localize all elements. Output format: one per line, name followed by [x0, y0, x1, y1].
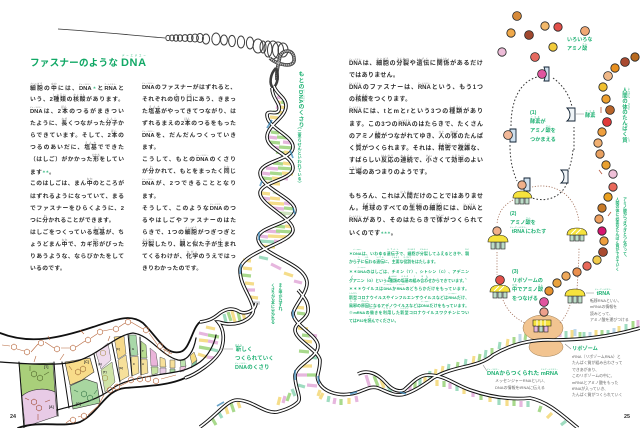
footnotes — [349, 248, 469, 323]
footnotes: ※mRNAの働はたら きを利用りよう した新型しんがた コロナウイルスワクチンについ — [349, 308, 469, 315]
label: chain growth note: 人間の体に必要なたんぱく質ができていく — [616, 197, 620, 271]
text right page paragraph 2: RNAアールエヌエー があり、そのはたらきで体からだ がつくられて — [349, 215, 483, 224]
band outline strokes — [0, 318, 216, 428]
base letters: [C] — [84, 360, 89, 364]
text: tRNA explanation: アミノ酸を運びつける — [590, 317, 629, 322]
label: step 2: (2) — [510, 211, 516, 217]
text: ribosome explanation: たんぱく質が組み合わさって — [572, 360, 622, 365]
enzymes — [510, 67, 575, 191]
label: ribosome: リボゾーム — [572, 346, 598, 352]
label: various amino acids: いろいろな — [567, 37, 593, 43]
text: tRNA explanation: mRNAの情報を — [590, 304, 617, 309]
text column 1: ょうどまん中なか で、カギ形がた がぴった — [30, 239, 124, 248]
text right page paragraph 1: すばらしい反応はんのう の連続れんぞく で、小ちい さくて効率こうりつ のよい — [349, 155, 483, 164]
label: step 3: 中なか でアミノ酸さん — [512, 284, 543, 293]
dashed path of enzyme — [510, 77, 574, 200]
DNA double helix rungs — [259, 97, 295, 247]
label: newly made DNA chain: 新あたら しく — [235, 344, 253, 353]
molecule chain upper band — [2, 319, 172, 362]
small base panels — [96, 335, 197, 392]
label: various amino acids — [567, 36, 593, 52]
text: ribosome explanation: tRNAが入っていき、 — [572, 386, 608, 391]
footnotes: てはP32を読よ んでください。 — [349, 316, 398, 323]
label: enzyme: 酵素こうそ — [585, 110, 595, 119]
label: chain splits: くさりが2本に分かれる — [271, 283, 276, 324]
base letters: (A) — [98, 362, 102, 366]
lower helix rungs — [212, 375, 566, 425]
label: step 1 — [530, 110, 556, 143]
text column 1: つに分わ かれることができます。 — [30, 215, 115, 224]
text column 2: それぞれの切き り口ぐち にあう、きまっ — [142, 94, 236, 103]
text: mRNA explanation: DNAの情報をtRNAに伝える — [495, 385, 545, 390]
text: tRNA explanation — [590, 298, 629, 322]
label: chain growth note: アミノ酸がつぎつぎとつながって、 — [623, 197, 628, 259]
text column 2: ます。 — [142, 194, 160, 200]
label: newly made DNA chain — [235, 344, 274, 371]
base letters: [G] — [119, 366, 123, 370]
label: mRNA made from DNA: DNAディーエヌエー からつくられた mRNAエムアールエヌエー — [487, 369, 558, 377]
text column 1: （はしご）がかかった形かたち をしてい — [30, 154, 124, 163]
base letters — [44, 347, 144, 409]
text column 2: そうして、このようなDNAディーエヌエー のつ — [142, 204, 236, 212]
molecule structures in T A C G panels — [30, 366, 49, 381]
label: human body protein: 人間にんげん の 体からだ のたんぱく 質しつ — [621, 87, 630, 142]
label: chain growth note — [616, 197, 628, 271]
text: mRNA explanation: メッセンジャーRNAといい、 — [495, 378, 547, 383]
footnotes: ＊DNAディーエヌエー は、いわゆる遺伝子いでんし で、細胞さいぼう が分裂ぶんれつ してふえるときや、親おや — [349, 249, 469, 256]
text column 2 — [142, 82, 236, 272]
text column 1: このはしごは、まん中なか のところが — [30, 178, 124, 187]
tRNA units — [488, 191, 587, 332]
text column 1 — [30, 82, 124, 272]
label: step 2: アミノ酸さん を — [510, 217, 536, 226]
text column 1: ます＊＊。 — [30, 170, 55, 177]
text: tRNA explanation: 転移RNAといい、 — [590, 298, 622, 303]
base letters: [C] — [116, 347, 120, 351]
label: step 1: アミノ酸さん を — [530, 125, 556, 134]
text: tRNA explanation: 読みとって、 — [590, 311, 613, 316]
text right page paragraph 1: く質しつ がつくられます。それは、精密せいみつ で複雑ふくざつ な、 — [349, 143, 483, 152]
text column 2: ます。 — [142, 145, 160, 151]
footnotes: ＊＊DNAディーエヌエー のはしごは、チミン（T）、シトシン（C）、アデニン（A）、 — [349, 268, 469, 280]
DNA helix strands — [185, 86, 640, 428]
footnotes: ＊＊＊ウイルスはDNAディーエヌエー かRNAアールエヌエー のどちらかだけをもっています。 — [349, 285, 469, 291]
text: ribosome explanation: このリボゾームの中に、 — [572, 373, 615, 378]
text column 2: DNAディーエヌエー のファスナーがはずれると、 — [142, 83, 236, 91]
coil of chromosome thread — [58, 29, 294, 88]
label: step 3: をつなげる — [512, 296, 538, 302]
label: various amino acids: アミノ酸さん — [567, 43, 587, 52]
footnotes: 風邪かぜ の原因げんいん になるアデノウイルスなどはDNAディーエヌエー だけをもっています。 — [349, 301, 469, 308]
base letters: [G] — [76, 402, 81, 406]
text right page paragraph 1: RNAアールエヌエー には、tとmとrという3つの種類しゅるい があり — [349, 106, 483, 115]
text column 1: たように、長なが くつながった分子ぶんし か — [30, 118, 124, 127]
protein chain of amino acids — [540, 53, 639, 306]
text column 2: こうして、もとのDNAディーエヌエー のくさり — [142, 155, 236, 163]
text column 2: るやはしごやファスナーのはた — [142, 218, 236, 224]
text column 1: はしごをつくっている塩基えんき が、ち — [30, 227, 124, 236]
text column 2: DNAディーエヌエー が、2つできることとなり — [142, 179, 236, 187]
text right page paragraph 1: ではありません。 — [349, 73, 399, 79]
text: ribosome explanation: できあがあり、 — [572, 367, 599, 372]
brown dotted arrows between tRNAs — [497, 186, 579, 323]
label: step 1: 酵素こうそ が — [530, 116, 546, 125]
base letters: A — [142, 362, 144, 366]
text: ribosome explanation: rRNA（リボゾームRNA）と — [572, 354, 621, 359]
text right page paragraph 2 — [349, 190, 483, 238]
text right page paragraph 2: ん。地球ちきゅう のすべての生物せいぶつ の細胞さいぼう には、DNAディーエヌエー と — [349, 203, 483, 212]
base letters: G — [132, 347, 134, 351]
text column 2: DNAディーエヌエー を、だんだんつくっていき — [142, 131, 236, 139]
text column 2: た塩基えんき がやってきてつながり、は — [142, 106, 236, 115]
text right page paragraph 1: の核酸かくさん をつくります。 — [349, 94, 411, 103]
label: step 3: リボゾームの — [512, 278, 543, 284]
panel: cytosine C — [65, 358, 94, 385]
text column 1: 細胞さいぼう の中なか には、DNAディーエヌエー ＊とRNAアールエヌエー と — [30, 83, 124, 92]
replication fork rungs — [198, 257, 323, 399]
text right page paragraph 1 — [349, 58, 483, 176]
label: step 2: tRNAティーアールエヌエー にわたす — [510, 227, 546, 235]
label: chain splits: まん中がはずれ、 — [278, 283, 284, 314]
text column 1: らできています。そして、2本ほん の — [30, 130, 124, 139]
text column 2: ずれるまえの2本ほん のつるをもった — [142, 118, 236, 127]
base letters: C — [133, 362, 135, 366]
label: step 3: (3) — [512, 269, 518, 275]
text column 2: 分裂ぶんれつ したり、親おや と似に た子こ が生う まれ — [142, 239, 236, 248]
footnotes: グアニン（G）という4種類しゅるい の塩基えんき の組く み合あ わせからできています。 — [349, 276, 466, 283]
panel: adenine A — [22, 389, 57, 427]
label: step 1: (1) — [530, 110, 536, 116]
base letters: T — [142, 349, 144, 353]
label: step 2 — [510, 211, 546, 235]
text column 1: りあうような、ならびかたをして — [30, 254, 124, 260]
text column 2: てくるわけが、化学かがく のうえではっ — [142, 251, 236, 260]
ribosome — [523, 315, 563, 356]
text: mRNA explanation — [495, 378, 547, 390]
label: original DNA chain: もとの DNAディーエヌエー のくさり — [297, 71, 305, 128]
text right page paragraph 2: もちろん、これは人間にんげん だけのことではありませ — [349, 191, 483, 200]
text column 1: DNAディーエヌエー は、2本ほん のつるがまきつい — [30, 106, 124, 115]
text column 1: いるのです。 — [30, 266, 66, 272]
text column 1: でファスナーをひらくように、2 — [30, 206, 124, 212]
base letters: [A] — [49, 405, 54, 409]
mRNA rungs above strand — [429, 320, 638, 378]
label: tRNA: tRNAティーアールエヌエー — [595, 289, 612, 297]
footnotes: から子こ に伝つた わる遺伝いでん に、主要しゅよう な役割やくわり をはたします。 — [349, 257, 438, 264]
text right page paragraph 1: ます。この3つのRNAアールエヌエー のはたらきで、たくさん — [349, 120, 483, 128]
molecule chain lower band — [66, 375, 176, 423]
page number 24: 24 — [10, 414, 16, 420]
label: step 3 — [512, 269, 543, 302]
panel: guanine G — [70, 379, 100, 409]
page number 25: 25 — [624, 414, 630, 420]
label: chain splits — [271, 283, 284, 324]
text column 2: きりわかったのです。 — [142, 266, 202, 272]
text column 2: らきで、1つの細胞さいぼう がつぎつぎと — [142, 227, 236, 236]
label: double helix note: （二重らせんといわれている） — [298, 125, 302, 185]
growth arrows on chain — [599, 107, 611, 216]
text right page paragraph 2: いくのです＊＊＊。 — [349, 231, 397, 238]
label: newly made DNA chain: つくられていく — [235, 356, 274, 362]
text column 2: が分わ かれて、もとをまったく同おな じ — [142, 166, 236, 175]
footnotes: 新型しんがた コロナウイルスやインフルエンザウイルスなどはRNAアールエヌエー だけ、 — [349, 293, 469, 300]
leader lines — [220, 114, 594, 371]
text right page paragraph 1: DNAディーエヌエー は、細胞さいぼう の分裂ぶんれつ や遺伝いでん に関係かんけい があるだけ — [349, 58, 483, 67]
label: newly made DNA chain: DNAディーエヌエー のくさり — [235, 363, 270, 371]
text right page paragraph 1: 工場こうじょう のあつまりのようです。 — [349, 167, 431, 176]
label: step 1: つかまえる — [530, 137, 556, 143]
text right page paragraph 1: DNAディーエヌエー のファスナーは、RNAアールエヌエー という、もう1つ — [349, 83, 483, 91]
text right page paragraph 1: のアミノ酸さん がつながれてゆき、人ひと の体からだ のたんぱ — [349, 131, 483, 140]
free amino acids — [493, 12, 589, 316]
text: ribosome explanation: たんぱく質がつくられていく — [572, 392, 622, 397]
title: ファスナーのような DNAデーエヌエー — [30, 54, 147, 69]
text column 1: つるのあいだに、塩基えんき でできた — [30, 142, 124, 151]
text column 1: はずれるようになっていて、まる — [30, 194, 124, 200]
base letters: [T] — [103, 370, 107, 374]
unzipped wide band with base pair panels — [0, 318, 216, 428]
panel: thymine T — [19, 363, 55, 396]
text: ribosome explanation — [572, 354, 622, 397]
text: ribosome explanation: mRNAとアミノ酸をもった — [572, 380, 618, 385]
lobe rungs at the twist — [198, 327, 215, 357]
text column 1: いう、2種類しゅるい の核酸かくさん があります。 — [30, 94, 124, 103]
base letters: [T] — [44, 365, 48, 369]
